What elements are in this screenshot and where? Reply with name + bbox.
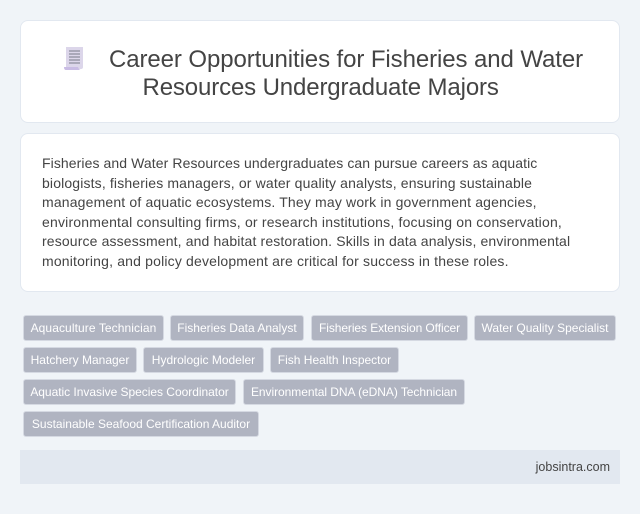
heading: title [109, 46, 583, 101]
tag [311, 315, 468, 341]
tag [143, 347, 264, 373]
tag [23, 315, 164, 341]
tag: Sustainable Seafood Certification Auditor [32, 417, 250, 431]
tag: Aquatic Invasive Species Coordinator [30, 385, 229, 399]
text block: description: environmental consulting firms, or research institutions, focusing on conservation, [42, 214, 562, 230]
footer text: jobsintra.com [536, 460, 610, 474]
tag [270, 347, 399, 373]
tag: Fisheries Data Analyst [177, 321, 297, 335]
tag: Fisheries Extension Officer [319, 321, 460, 335]
text block: description: Fisheries and Water Resources undergraduates can pursue careers as aquatic [42, 155, 537, 171]
tag: Fish Health Inspector [278, 353, 391, 367]
tag [474, 315, 616, 341]
tag: Environmental DNA (eDNA) Technician [251, 385, 457, 399]
tags: career list [23, 315, 616, 437]
tag [170, 315, 304, 341]
text block: description [42, 155, 570, 269]
tag: Hydrologic Modeler [152, 353, 255, 367]
icon: document scroll [64, 47, 83, 70]
tag [23, 379, 236, 405]
panel: description card [20, 133, 620, 292]
tag [23, 347, 137, 373]
tag: Water Quality Specialist [482, 321, 608, 335]
panel: title card [20, 20, 620, 123]
text block: description: biologists, fisheries managers, or water quality analysts, ensuring sustainable [42, 174, 532, 190]
text block: description: management of aquatic ecosystems. They may work in government agencies, [42, 194, 537, 210]
tag: Aquaculture Technician [31, 321, 156, 335]
text block: description: monitoring, and policy development are critical for success in these roles. [42, 252, 509, 268]
heading: title: Resources Undergraduate Majors [142, 74, 499, 101]
text block: description: resource assessment, and habitat restoration. Skills in data analysis, environmental [42, 233, 570, 249]
tag [243, 379, 465, 405]
tag [23, 411, 259, 437]
footer [20, 450, 620, 484]
heading: title: Career Opportunities for Fisheries and Water [109, 46, 583, 73]
tag: Hatchery Manager [31, 353, 129, 367]
